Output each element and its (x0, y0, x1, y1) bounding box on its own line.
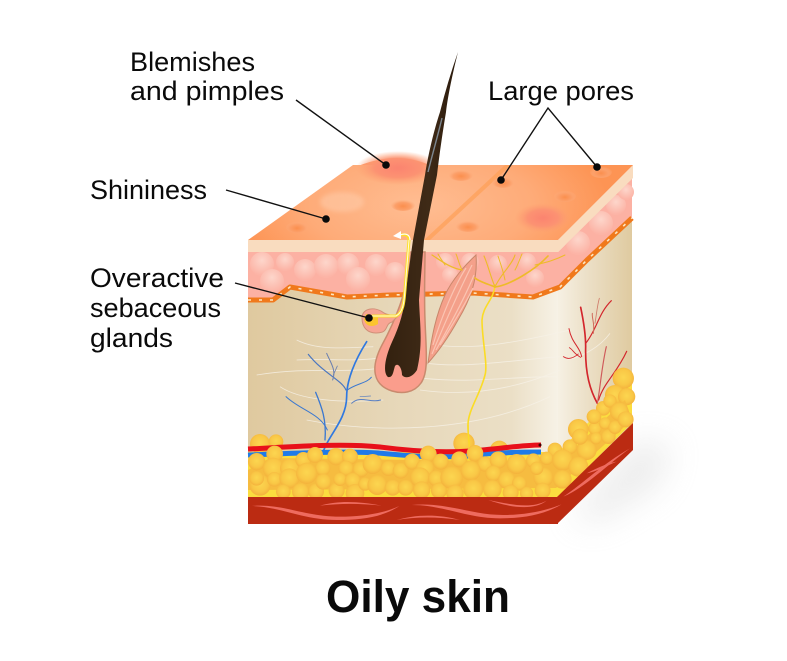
blue vein (286, 342, 381, 452)
arrector pili muscle (428, 255, 476, 363)
title: Oily skin (326, 571, 510, 622)
basal membrane (248, 218, 632, 300)
dermis fibres (257, 330, 610, 428)
nerve over fat (468, 425, 469, 447)
shine highlight (320, 192, 364, 212)
label: blemishes and pimples (130, 47, 284, 106)
sebaceous gland (362, 231, 410, 333)
skin crease (424, 165, 511, 240)
hair follicle (375, 52, 458, 392)
muscle fibres (252, 448, 630, 520)
dermis front face (248, 252, 559, 512)
fat mass filler (248, 400, 632, 490)
top light band side (558, 165, 633, 252)
skin surface (248, 165, 633, 240)
fat background (248, 380, 632, 497)
label: shininess: Shininess (90, 175, 207, 205)
pores (286, 166, 612, 233)
blemish spots (356, 151, 571, 233)
label: large pores: Large pores (488, 76, 634, 106)
nerve (432, 254, 565, 460)
blood vessels (248, 444, 542, 457)
label: overactive sebaceous glands: sebaceous (90, 293, 221, 323)
skin cross-section block (248, 52, 635, 524)
label: overactive sebaceous glands: glands (90, 323, 173, 353)
leader lines (226, 100, 597, 318)
label: overactive sebaceous glands: Overactive (90, 263, 224, 293)
shadow under skin block (570, 440, 672, 522)
leader dots (322, 161, 601, 322)
muscle layer side (557, 423, 633, 524)
front fat globules (248, 394, 634, 503)
top light band front (248, 240, 558, 252)
dermis side face (558, 178, 632, 510)
blemish bump (358, 158, 432, 166)
label: blemishes and pimples: Blemishes (130, 47, 255, 77)
sebum arrow (393, 231, 401, 239)
hair shaft (385, 52, 458, 377)
epidermis pink layer (248, 178, 632, 300)
label: overactive sebaceous glands (90, 263, 224, 353)
epidermis cells (250, 184, 634, 293)
back fat globules (250, 368, 635, 459)
sebum duct (372, 235, 409, 316)
muscle layer front (248, 497, 558, 524)
label: blemishes and pimples: and pimples (130, 76, 284, 106)
hair highlight (428, 118, 442, 172)
red capillary (563, 298, 627, 403)
